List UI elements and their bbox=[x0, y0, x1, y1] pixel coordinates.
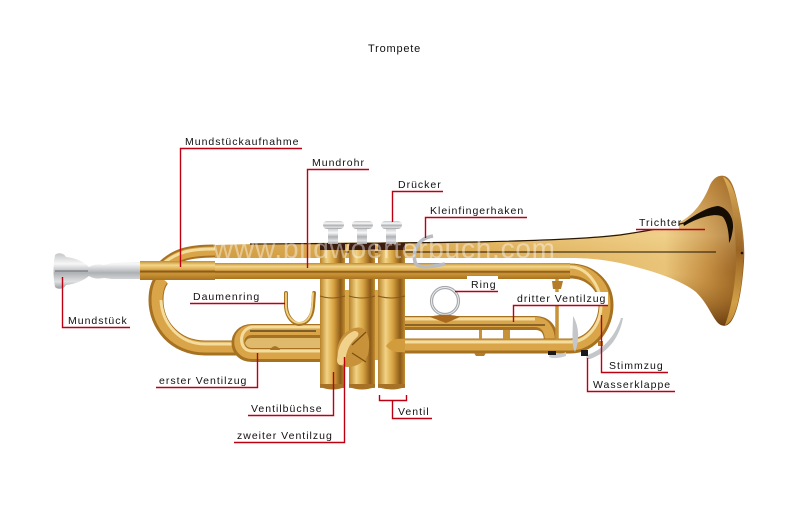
ring bbox=[430, 288, 460, 323]
left loop tubing bbox=[156, 249, 240, 348]
label: Ring bbox=[455, 276, 498, 292]
first valve slide bbox=[238, 327, 326, 355]
label: Ventilbüchse: Ventilbüchse bbox=[251, 403, 323, 415]
label: Daumenring bbox=[190, 291, 285, 304]
label: Stimmzug bbox=[602, 315, 668, 372]
label: Mundrohr: Mundrohr bbox=[312, 157, 365, 169]
label: Wasserklappe: Wasserklappe bbox=[593, 379, 671, 391]
label: Ventil: Ventil bbox=[398, 406, 430, 418]
water keys bbox=[548, 316, 623, 359]
label: Drücker: Drücker bbox=[398, 179, 442, 191]
valve casings bbox=[320, 243, 405, 390]
label: dritter Ventilzug bbox=[513, 292, 608, 322]
pinky hook bbox=[414, 236, 445, 267]
label: Kleinfingerhaken: Kleinfingerhaken bbox=[430, 205, 524, 217]
second valve slide bbox=[337, 328, 405, 367]
label: zweiter Ventilzug bbox=[234, 357, 344, 442]
label: Trichter: Trichter bbox=[639, 217, 682, 229]
label: Mundstück bbox=[62, 277, 130, 328]
trumpet illustration bbox=[54, 176, 744, 390]
label: erster Ventilzug: erster Ventilzug bbox=[159, 375, 247, 387]
bell bbox=[215, 176, 744, 326]
label: Mundstückaufnahme bbox=[180, 136, 302, 267]
label: dritter Ventilzug: dritter Ventilzug bbox=[517, 293, 606, 305]
label: Ring: Ring bbox=[471, 279, 497, 291]
label: Ventilbüchse bbox=[248, 372, 334, 416]
title: Trompete bbox=[368, 43, 421, 55]
label: Trichter bbox=[636, 216, 705, 230]
label: Stimmzug: Stimmzug bbox=[609, 360, 664, 372]
label: Drücker bbox=[392, 179, 443, 222]
leadpipe and receiver bbox=[140, 261, 570, 280]
label: Mundstück: Mundstück bbox=[68, 315, 128, 327]
watermark: www.bildwoerterbuch.com bbox=[212, 233, 555, 264]
label: Wasserklappe bbox=[588, 358, 675, 392]
label: Daumenring: Daumenring bbox=[193, 291, 260, 303]
label: zweiter Ventilzug: zweiter Ventilzug bbox=[237, 430, 333, 442]
label: Mundrohr bbox=[308, 157, 369, 268]
label: erster Ventilzug bbox=[156, 353, 258, 388]
third valve slide and tuning slide tubing bbox=[388, 267, 606, 356]
thumb saddle bbox=[286, 293, 314, 324]
valve buttons bbox=[323, 221, 402, 244]
label: Kleinfingerhaken bbox=[426, 205, 527, 238]
label: Mundstückaufnahme: Mundstückaufnahme bbox=[185, 136, 299, 148]
mouthpiece bbox=[54, 253, 140, 289]
label: Ventil bbox=[380, 395, 432, 418]
